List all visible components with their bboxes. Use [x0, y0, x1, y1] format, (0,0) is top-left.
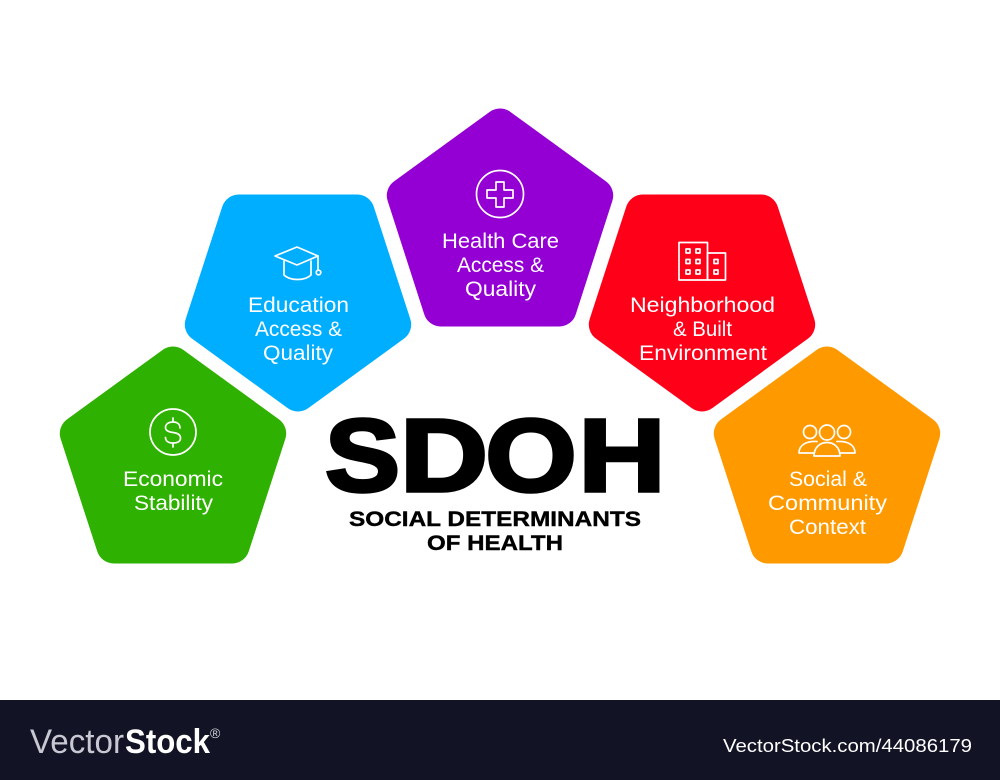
- logo registered mark: ®: [210, 725, 221, 741]
- footer url: VectorStock.com/44086179: [723, 736, 972, 756]
- label: neighborhood and built environment: Neighborhood: [630, 294, 775, 317]
- label: neighborhood and built environment: & Built: [673, 318, 732, 341]
- label: education access and quality: Education: [248, 294, 349, 317]
- title: SDOH: D: [400, 398, 488, 513]
- title: SDOH: O: [485, 399, 577, 513]
- label: health care access and quality: Health Care: [442, 230, 559, 253]
- panel: education: [202, 212, 394, 394]
- subtitle: SOCIAL DETERMINANTS: [349, 507, 641, 531]
- icon: buildings: [679, 242, 726, 280]
- icon: people: [799, 425, 855, 456]
- logo: VectorStock: [30, 723, 210, 761]
- panel: economic stability: [77, 364, 269, 546]
- label: health care access and quality: Access &: [457, 254, 544, 277]
- label: economic stability: Stability: [134, 492, 214, 515]
- icon: graduation cap: [275, 247, 321, 280]
- label: social and community context: Community: [768, 492, 888, 515]
- label: economic stability: [123, 468, 223, 515]
- logo: VectorStock: Vector: [30, 723, 124, 761]
- label: education access and quality: Access &: [255, 318, 342, 341]
- subtitle: [349, 507, 641, 555]
- label: economic stability: Economic: [123, 468, 223, 491]
- title: SDOH: S: [325, 397, 400, 513]
- title: SDOH: H: [578, 398, 666, 513]
- subtitle: OF HEALTH: [427, 531, 563, 555]
- footer bar: [0, 700, 1000, 780]
- label: neighborhood and built environment: [630, 294, 775, 365]
- label: education access and quality: Quality: [263, 342, 334, 365]
- panel: social and community: [731, 364, 923, 546]
- panel: health care: [404, 126, 596, 309]
- label: health care access and quality: [442, 230, 559, 301]
- label: social and community context: Context: [789, 516, 866, 539]
- panel: neighborhood: [606, 212, 798, 394]
- title: SDOH: [325, 397, 666, 513]
- label: neighborhood and built environment: Environment: [639, 342, 767, 365]
- label: social and community context: [768, 468, 888, 539]
- label: social and community context: Social &: [789, 468, 867, 491]
- icon: dollar: [150, 409, 196, 455]
- label: health care access and quality: Quality: [465, 278, 537, 301]
- logo: VectorStock: Stock: [125, 723, 210, 761]
- icon: medical cross: [476, 170, 524, 218]
- label: education access and quality: [248, 294, 349, 365]
